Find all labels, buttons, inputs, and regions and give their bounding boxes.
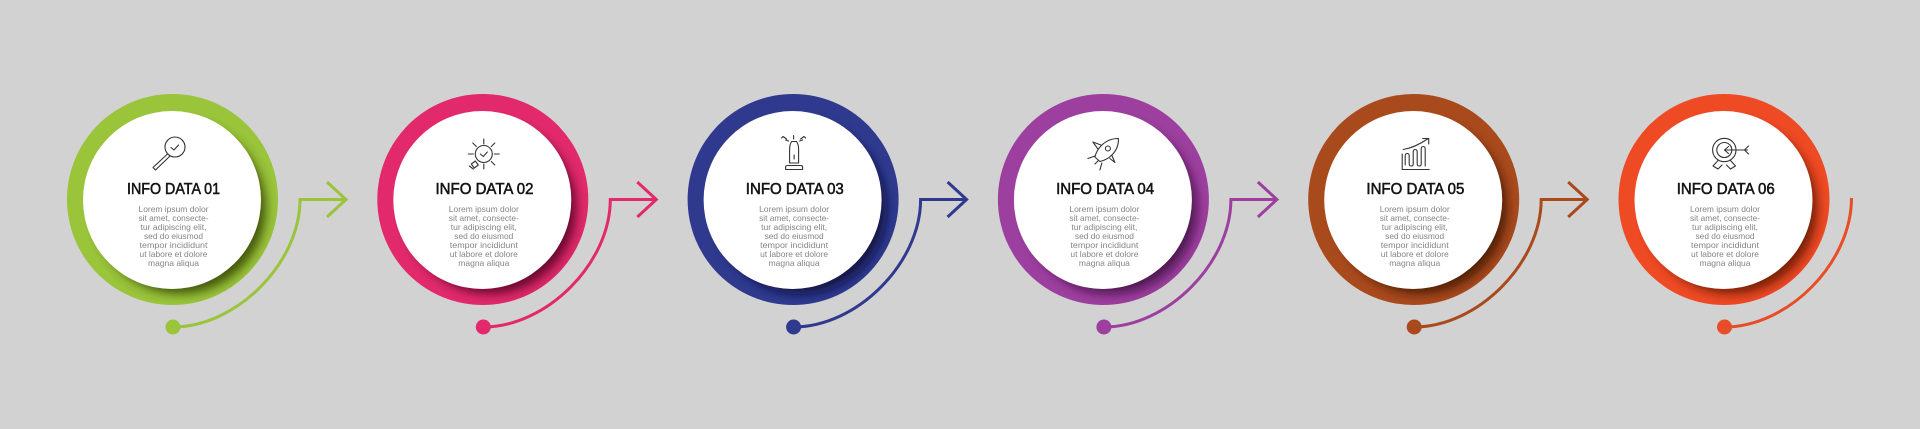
body text 1 [138,204,209,268]
step 1 [67,94,346,334]
ring shadow 1 [94,122,266,294]
step 4 [998,94,1277,334]
body text 4: sed do eiusmod [1075,231,1134,241]
body text 2: sit amet, consecte- [449,213,519,223]
body text 5: tempor incididunt [1381,240,1449,250]
step 6 [1618,94,1852,334]
connector arrow 3 [786,182,967,334]
body text 3: Lorem ipsum dolor [759,204,829,214]
body text 6: magna aliqua [1700,258,1751,268]
body text 1: tempor incididunt [140,240,208,250]
ring 2 [377,94,588,305]
step 5 [1308,94,1587,334]
body text 4: sit amet, consecte- [1069,213,1140,223]
body text 3: sed do eiusmod [765,231,824,241]
body text 6: tempor incididunt [1691,240,1760,250]
ring shadow 4 [1025,122,1197,294]
ring 5 [1308,94,1519,305]
body text 2 [449,204,519,268]
step 3 [688,94,967,334]
connector arrow 2 [476,182,656,334]
ring shadow 5 [1335,122,1507,294]
body text 4: tur adipiscing elit, [1071,222,1137,232]
icon: rocket [1088,138,1118,170]
white disc 6 [1634,111,1812,289]
connector arrow 1 [166,182,346,334]
icon: siren light [782,136,806,170]
heading 2: INFO DATA 02 [435,181,533,198]
icon: target with arrow [1713,138,1748,169]
heading 5: INFO DATA 05 [1366,181,1464,198]
ring 1 [67,94,278,305]
ring shadow 3 [715,122,887,294]
ring 6 [1618,94,1830,305]
body text 5: magna aliqua [1389,258,1441,268]
body text 4 [1069,204,1140,268]
body text 2: tempor incididunt [450,240,519,250]
connector arrow 5 [1407,182,1587,334]
body text 2: Lorem ipsum dolor [449,204,519,214]
heading 4: INFO DATA 04 [1056,181,1154,198]
body text 5: ut labore et dolore [1381,249,1449,259]
body text 1: magna aliqua [148,258,199,268]
icon: magnifier check [153,137,185,170]
body text 2: ut labore et dolore [450,249,518,259]
body text 4: Lorem ipsum dolor [1069,204,1140,214]
body text 6: ut labore et dolore [1691,249,1759,259]
heading 3: INFO DATA 03 [746,181,844,198]
body text 5: tur adipiscing elit, [1382,222,1448,232]
body text 2: sed do eiusmod [454,231,514,241]
body text 6: sed do eiusmod [1696,231,1755,241]
body text 3: tur adipiscing elit, [761,222,827,232]
white disc 4 [1014,111,1192,289]
body text 1: tur adipiscing elit, [140,222,206,232]
body text 3: ut labore et dolore [760,249,828,259]
body text 2: magna aliqua [458,258,510,268]
ring 4 [998,94,1209,305]
ring shadow 6 [1646,122,1818,294]
white disc 1 [83,111,261,289]
body text 4: ut labore et dolore [1070,249,1139,259]
body text 3: magna aliqua [769,258,820,268]
body text 4: magna aliqua [1079,258,1130,268]
body text 6: Lorem ipsum dolor [1690,204,1760,214]
ring 3 [688,94,899,305]
body text 3 [759,204,829,268]
white disc 5 [1324,111,1502,289]
body text 1: sit amet, consecte- [138,213,209,223]
body text 5 [1380,204,1450,268]
body text 6 [1690,204,1760,268]
icon: growth chart [1402,138,1429,170]
body text 4: tempor incididunt [1070,240,1139,250]
white disc 3 [704,111,882,289]
white disc 2 [393,111,571,289]
body text 2: tur adipiscing elit, [451,222,517,232]
body text 1: sed do eiusmod [144,231,203,241]
ring shadow 2 [404,122,576,294]
icon: light bulb check [468,139,499,169]
body text 6: tur adipiscing elit, [1692,222,1758,232]
body text 3: sit amet, consecte- [759,213,829,223]
body text 5: Lorem ipsum dolor [1380,204,1450,214]
connector arc 6 [1717,198,1852,334]
body text 1: ut labore et dolore [140,249,208,259]
body text 3: tempor incididunt [760,240,829,250]
body text 6: sit amet, consecte- [1690,213,1760,223]
body text 5: sed do eiusmod [1385,231,1445,241]
connector arrow 4 [1096,182,1277,334]
body text 5: sit amet, consecte- [1380,213,1450,223]
step 2 [377,94,656,334]
heading 6: INFO DATA 06 [1677,181,1775,198]
body text 1: Lorem ipsum dolor [138,204,209,214]
heading 1: INFO DATA 01 [127,181,220,198]
